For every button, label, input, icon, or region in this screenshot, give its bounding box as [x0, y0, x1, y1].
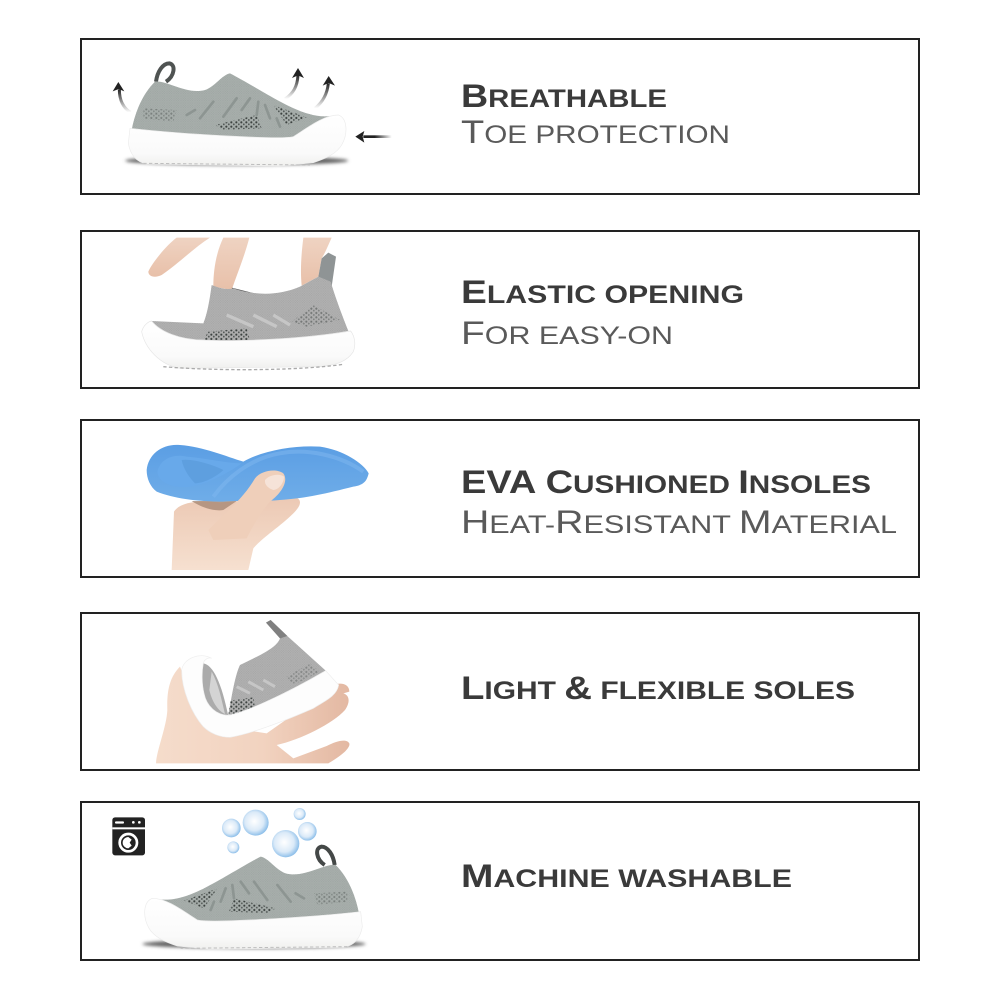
heading: light and flexible soles: LIGHT & FLEXIBLE SOLES	[461, 670, 855, 706]
washing machine icon	[112, 817, 145, 855]
hand pulling elastic shoe on	[142, 238, 355, 370]
small airflow arrows	[113, 68, 392, 143]
heading: EVA cushioned insoles: EVA C USHIONED INSOLES	[461, 464, 871, 500]
hand holding blue insole	[147, 445, 369, 570]
panel: machine washable	[81, 802, 919, 960]
panel: elastic opening	[81, 231, 919, 388]
panel 3 frame	[81, 420, 919, 577]
shoe illustration	[142, 847, 366, 949]
panel: EVA insoles	[81, 420, 919, 577]
panel 2 frame	[81, 231, 919, 388]
heading: machine washable: MACHINE WASHABLE	[461, 858, 792, 894]
subheading: toe protection: TOE PROTECTION	[461, 114, 730, 150]
hand bending flexible shoe	[156, 620, 349, 763]
heading: elastic opening: ELASTIC OPENING	[461, 274, 744, 310]
shoe illustration with airflow arrows	[113, 63, 392, 166]
heading: breathable: BREATHABLE	[461, 78, 667, 114]
subheading: for easy-on: FOR EASY-ON	[461, 315, 673, 351]
panel 1 frame	[81, 39, 919, 194]
panel: light and flexible soles	[81, 613, 919, 770]
subheading: heat-resistant material: HEAT- RESISTANT MATERIAL	[461, 504, 897, 540]
panel 5 frame	[81, 802, 919, 960]
panel: breathable	[81, 39, 919, 194]
soap bubbles	[222, 808, 317, 857]
panel 4 frame	[81, 613, 919, 770]
